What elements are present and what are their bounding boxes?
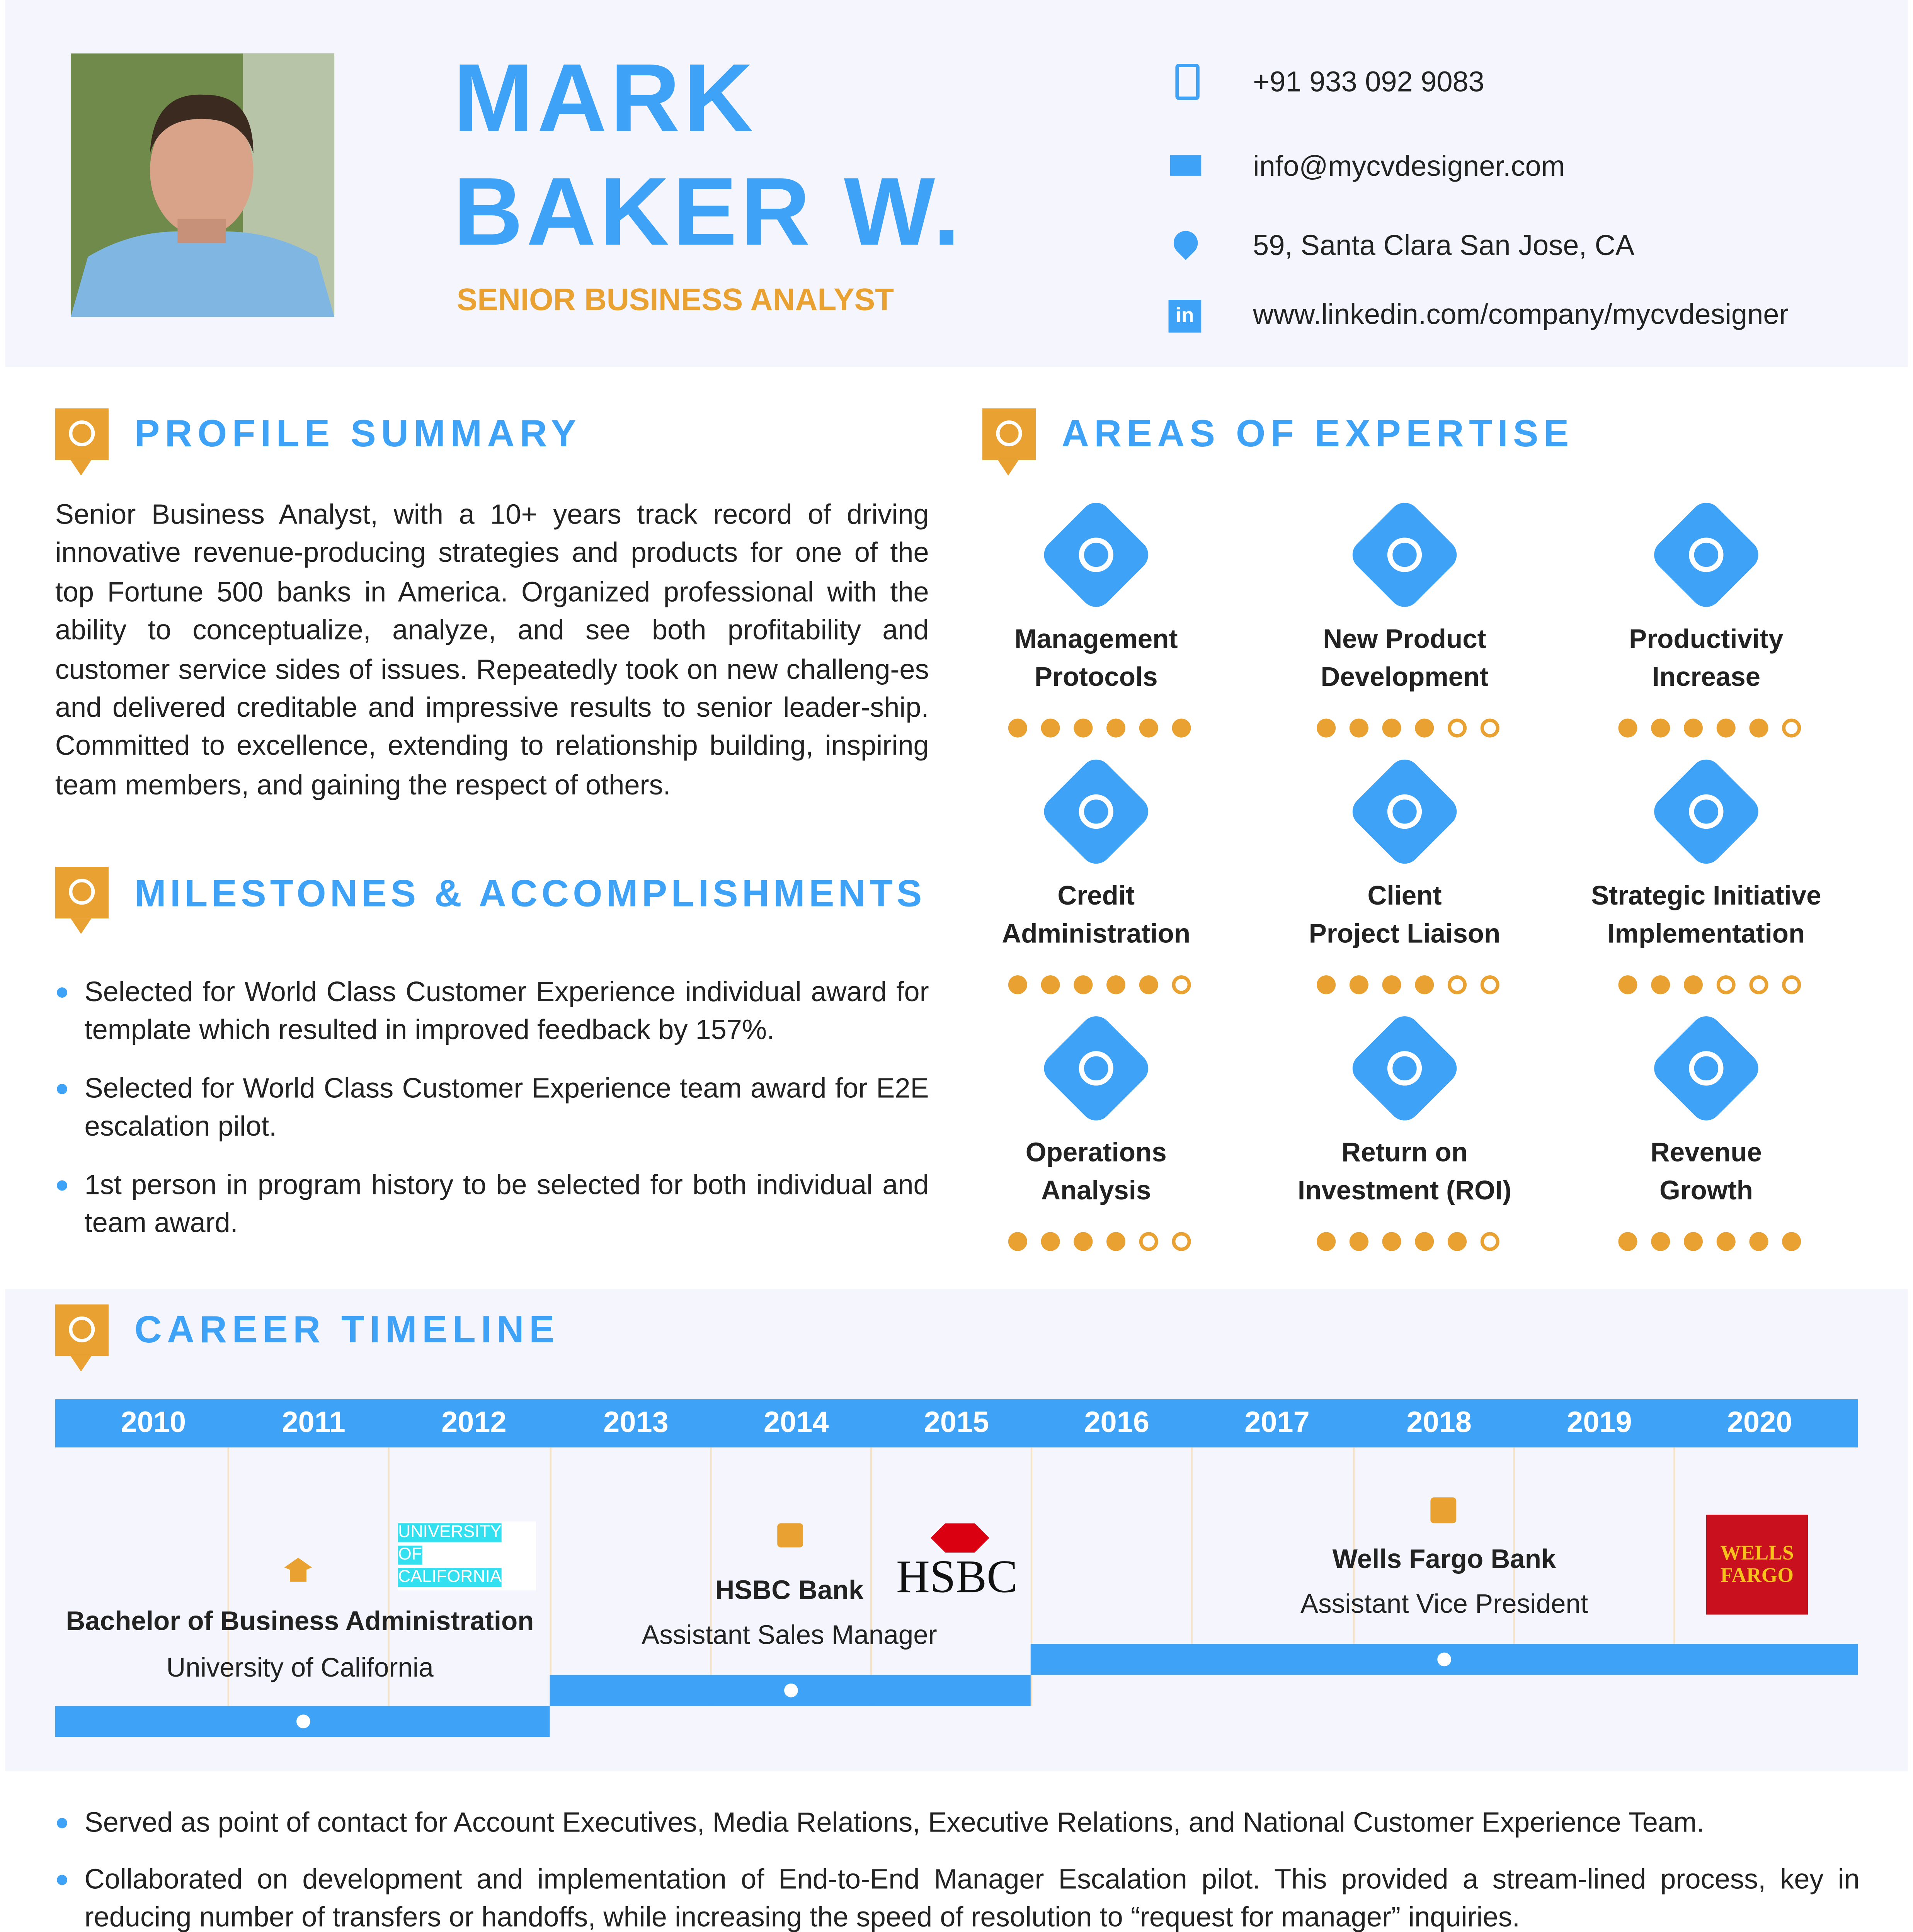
milestones heading <box>55 867 934 936</box>
contact list: info@mycvdesigner.com <box>1253 150 1565 183</box>
icon: linkedin <box>1169 300 1201 333</box>
education entry <box>68 1522 536 1682</box>
education entry: Bachelor of Business Administration <box>66 1608 534 1637</box>
skill: Credit Administration: Credit <box>1057 882 1135 912</box>
skill: Return on Investment: Investment (ROI) <box>1298 1177 1511 1206</box>
contact list: 59, Santa Clara San Jose, CA <box>1253 229 1634 262</box>
skill: Client Project Liaison <box>1256 748 1553 998</box>
education entry: University of California <box>166 1654 434 1684</box>
skill: Operations Analysis: Analysis <box>1041 1177 1151 1206</box>
logo: HSBC: HSBC <box>896 1551 1018 1602</box>
icon: mail <box>1170 155 1201 176</box>
skill: Productivity Increase: Increase <box>1652 663 1760 693</box>
career bullets <box>85 1804 1860 1932</box>
icon: phone <box>1175 64 1200 100</box>
name <box>453 41 963 269</box>
milestones bullets: 1st person in program history to be selected for both individual and team award. <box>85 1170 929 1240</box>
contact list <box>1160 52 1884 345</box>
skill: Management Protocols: Management <box>1014 626 1178 655</box>
text: 2015 <box>924 1406 989 1439</box>
logo: wells fargo: FARGO <box>1721 1563 1794 1587</box>
Wells Fargo entry: Assistant Vice President <box>1300 1590 1588 1620</box>
milestones bullets: Selected for World Class Customer Experience team award for E2E escalation pilot. <box>85 1073 929 1143</box>
text: 2014 <box>764 1406 829 1439</box>
skill: Revenue Growth <box>1558 1005 1854 1255</box>
text: 2020 <box>1727 1406 1792 1439</box>
expertise grid <box>948 491 1879 1258</box>
career timeline panel <box>5 1289 1908 1771</box>
career timeline heading: CAREER TIMELINE <box>134 1308 560 1351</box>
skill: Return on Investment <box>1256 1005 1553 1255</box>
areas of expertise heading: AREAS OF EXPERTISE <box>1062 412 1574 455</box>
step bars <box>55 1644 1858 1737</box>
skill: Strategic Initiative Implementation <box>1558 748 1854 998</box>
career bullets: Served as point of contact for Account Executives, Media Relations, Executive Relations, and National Customer Experience Team. <box>85 1808 1704 1838</box>
icon: grad cap <box>284 1558 312 1582</box>
milestones heading: MILESTONES & ACCOMPLISHMENTS <box>134 872 926 915</box>
contact list: +91 933 092 9083 <box>1253 65 1484 98</box>
skill: Operations Analysis: Operations <box>1026 1139 1167 1168</box>
name: BAKER W. <box>453 157 963 265</box>
skill: Revenue Growth: Revenue <box>1651 1139 1762 1168</box>
skill: Operations Analysis <box>948 1005 1244 1255</box>
career bullets: Collaborated on development and implementation of End-to-End Manager Escalation pilot. This provided a stream-lined process, key in reducing number of transfers or handoffs, while increasing the speed of resolution to “request for manager” inquiries. <box>85 1864 1860 1932</box>
logo: HSBC <box>897 1523 1015 1593</box>
skill: Strategic Initiative Implementation: Implementation <box>1607 920 1805 949</box>
skill: New Product Development <box>1256 491 1553 741</box>
Wells Fargo entry <box>1258 1492 1827 1630</box>
skill: Management Protocols <box>948 491 1244 741</box>
skill: Productivity Increase: Productivity <box>1629 626 1784 655</box>
HSBC entry: HSBC Bank <box>715 1577 863 1606</box>
profile summary heading <box>55 408 607 477</box>
skill: Strategic Initiative Implementation: Strategic Initiative <box>1591 882 1821 912</box>
job title: SENIOR BUSINESS ANALYST <box>457 282 894 317</box>
icon: briefcase <box>777 1523 803 1548</box>
text: 2010 <box>121 1406 186 1439</box>
logo: university of california: UNIVERSITY <box>398 1523 502 1542</box>
logo: university of california <box>398 1522 536 1590</box>
skill: Management Protocols: Protocols <box>1035 663 1158 693</box>
logo: university of california: CALIFORNIA <box>398 1568 502 1587</box>
HSBC entry: Assistant Sales Manager <box>642 1621 937 1651</box>
contact list: www.linkedin.com/company/mycvdesigner <box>1253 298 1789 331</box>
HSBC entry <box>642 1523 1015 1650</box>
text: 2011 <box>282 1406 345 1439</box>
icon: linkedin: in <box>1176 303 1194 327</box>
name: MARK <box>453 43 757 151</box>
logo: wells fargo: WELLS <box>1720 1541 1794 1565</box>
profile summary heading: PROFILE SUMMARY <box>134 412 581 455</box>
skill: New Product Development: New Product <box>1323 626 1486 655</box>
photo <box>71 53 334 317</box>
skill: Client Project Liaison: Client <box>1367 882 1442 912</box>
timeline chart <box>0 1379 1913 1749</box>
header panel <box>5 0 1908 367</box>
skill: Return on Investment: Return on <box>1341 1139 1468 1168</box>
text: 2016 <box>1084 1406 1149 1439</box>
milestones bullets <box>85 974 929 1249</box>
icon: location <box>1169 226 1203 260</box>
skill: Revenue Growth: Growth <box>1659 1177 1753 1206</box>
text: 2019 <box>1567 1406 1632 1439</box>
skill: Credit Administration: Administration <box>1002 920 1190 949</box>
text: 2017 <box>1244 1406 1310 1439</box>
profile summary text: Senior Business Analyst, with a 10+ years track record of driving innovative revenue-producing strategies and products for one of the top Fortune 500 banks in America. Organized professional with the ability to conceptualize, analyze, and see both profitability and customer service sides of issues. Repeatedly took on new challeng-es and delivered creditable and impressive results to senior leader-ship. Committed to excellence, extending to relationship building, inspiring team members, and gaining the respect of others. <box>55 500 929 801</box>
Wells Fargo entry: Wells Fargo Bank <box>1333 1546 1556 1575</box>
areas of expertise heading <box>982 408 1551 477</box>
skill: Productivity Increase <box>1558 491 1854 741</box>
logo: wells fargo <box>1706 1515 1808 1615</box>
text: 2013 <box>603 1406 669 1439</box>
skill: New Product Development: Development <box>1321 663 1489 693</box>
skill: Credit Administration <box>948 748 1244 998</box>
text: 2012 <box>441 1406 507 1439</box>
icon: briefcase <box>1430 1497 1456 1523</box>
milestones bullets: Selected for World Class Customer Experience individual award for template which resulted in improved feedback by 157%. <box>85 977 929 1047</box>
skill: Client Project Liaison: Project Liaison <box>1309 920 1500 949</box>
logo: university of california: OF <box>398 1546 422 1565</box>
text: 2018 <box>1406 1406 1472 1439</box>
career timeline heading <box>55 1304 572 1373</box>
